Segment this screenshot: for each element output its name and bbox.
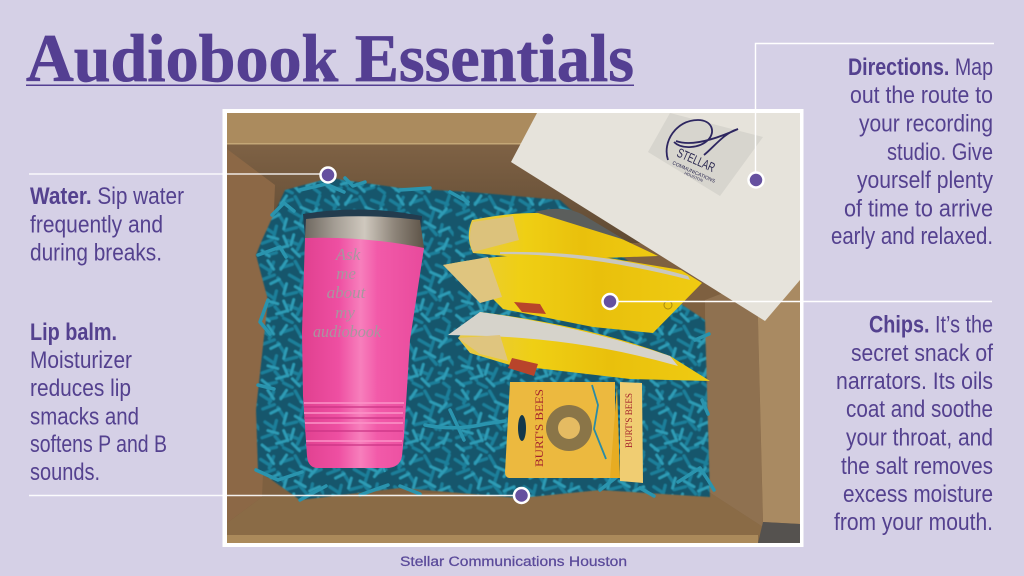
text block: chips: from your mouth. [834,509,993,536]
bags of chips [443,209,710,381]
text block: chips [834,312,993,536]
chip bag 1 [469,209,658,260]
logo: Stellar swirl: HOUSTON [684,170,704,183]
text block: lip balm [30,319,167,486]
text block: lip balm: Moisturizer [30,347,132,374]
text block: water: frequently and [30,212,163,238]
text block: water: Water. Sip water [30,183,184,210]
Burt's Bees lip balm [505,382,643,483]
text block: chips: Chips. It’s the [869,312,993,338]
mug lettering [313,245,381,341]
mug lettering: me [336,264,356,283]
shredded blue paper [256,178,714,500]
chip bag 2 [443,252,702,333]
footer credit: Stellar Communications Houston [400,554,627,569]
text block: directions: early and relaxed. [831,223,993,250]
text block: chips: coat and soothe [846,396,993,423]
Burt's Bees lip balm: BURT'S BEES [532,389,546,467]
text block: directions: out the route to [850,82,993,109]
text block: chips: narrators. Its oils [836,368,993,395]
text block: lip balm: Lip balm. [30,319,117,346]
logo: Stellar swirl: COMMUNICATIONS [671,160,717,185]
text block: directions: yourself plenty [857,167,993,194]
text block: directions: Directions. Map [848,54,993,81]
chip bag 3 [448,312,710,381]
text block: chips: secret snack of [851,340,993,367]
text block: lip balm: softens P and B [30,431,167,458]
text block: chips: your throat, and [846,424,993,452]
title: Audiobook Essentials [26,20,634,96]
photo frame [222,109,804,547]
text block: chips: the salt removes [841,453,993,480]
callout line and dot: directions [748,44,994,188]
cardboard box [227,113,800,543]
text block: directions: of time to arrive [844,196,993,222]
text block: water: during breaks. [30,240,162,266]
logo: Stellar swirl [667,120,738,185]
envelope with Stellar logo [511,113,800,321]
text block: directions [831,54,993,250]
mug lettering: my [335,303,355,322]
callout line and dot: lip balm [29,488,529,503]
callout line and dot: chips [602,294,992,309]
card [505,382,615,478]
lip balm tube: BURT'S BEES [624,393,634,448]
callout line and dot: water [29,168,336,182]
mug lettering: Ask [335,245,361,264]
photo: gift box with audiobook essentials [222,109,804,547]
text block: lip balm: sounds. [30,459,100,486]
mug lettering: about [327,283,367,302]
text block: lip balm: reduces lip [30,375,131,402]
text block: directions: your recording [859,110,993,138]
mug lettering: audiobook [313,322,381,341]
text block: directions: studio. Give [887,139,993,166]
logo: Stellar swirl: STELLAR [675,145,717,175]
pink tumbler [302,209,424,468]
text block: water [30,183,184,266]
text block: lip balm: smacks and [30,404,139,430]
text block: chips: excess moisture [843,481,993,508]
